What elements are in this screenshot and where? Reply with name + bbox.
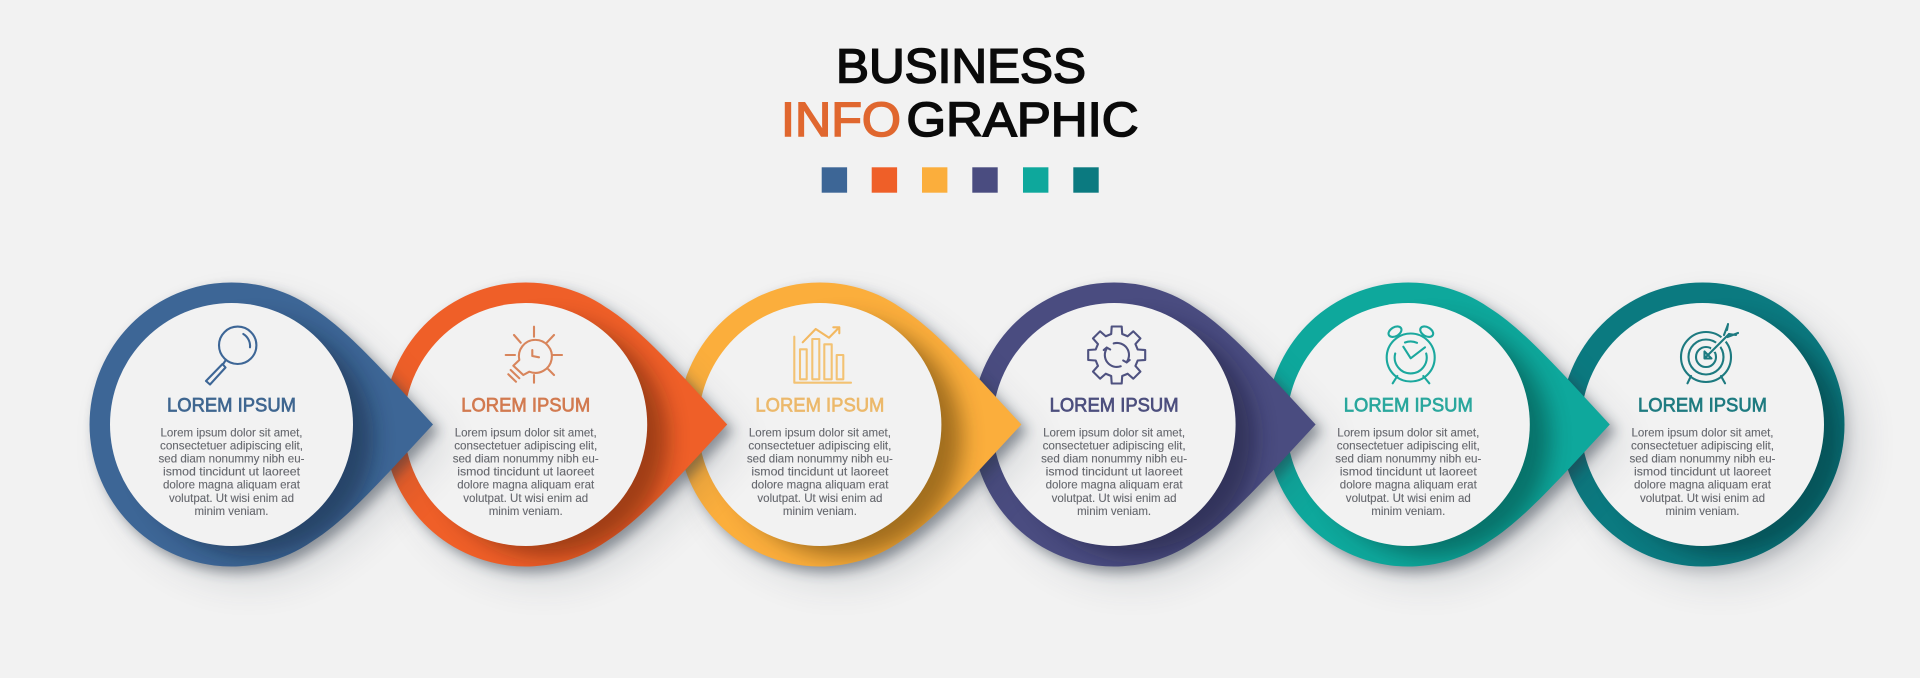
- body text: minim veniam.: [783, 504, 857, 518]
- title: INFO: [781, 94, 901, 147]
- body text: Lorem ipsum dolor sit amet,: [1632, 425, 1774, 439]
- body text: Lorem ipsum dolor sit amet,: [1043, 425, 1185, 439]
- body text: minim veniam.: [1371, 504, 1445, 518]
- body text: consectetuer adipiscing elit,: [1043, 438, 1186, 452]
- body text: consectetuer adipiscing elit,: [1337, 438, 1480, 452]
- body text: ismod tincidunt ut laoreet: [1046, 465, 1183, 479]
- body text: dolore magna aliquam erat: [1340, 478, 1477, 492]
- body text: dolore magna aliquam erat: [751, 478, 889, 492]
- body text: ismod tincidunt ut laoreet: [1340, 465, 1477, 479]
- body text: dolore magna aliquam erat: [457, 478, 595, 492]
- panel: step 3 chart: [678, 282, 1039, 584]
- icon: bar chart with arrow: [794, 327, 851, 383]
- body text: ismod tincidunt ut laoreet: [1634, 465, 1772, 479]
- title: BUSINESS: [836, 40, 1086, 94]
- body text: [158, 425, 304, 518]
- body text: minim veniam.: [194, 504, 268, 518]
- body text: consectetuer adipiscing elit,: [1631, 438, 1774, 452]
- title: [781, 40, 1138, 147]
- icon: light bulb: [506, 327, 562, 383]
- body text: sed diam nonummy nibh eu-: [1630, 452, 1776, 466]
- body text: ismod tincidunt ut laoreet: [751, 465, 889, 479]
- colour legend squares: [822, 167, 1099, 193]
- body text: dolore magna aliquam erat: [1046, 478, 1183, 492]
- heading: LOREM IPSUM: [755, 395, 884, 417]
- body text: sed diam nonummy nibh eu-: [1041, 452, 1187, 466]
- heading: LOREM IPSUM: [1050, 395, 1179, 417]
- body text: Lorem ipsum dolor sit amet,: [1337, 425, 1479, 439]
- icon: magnifier: [206, 327, 256, 384]
- body text: volutpat. Ut wisi enim ad: [757, 491, 882, 505]
- body text: ismod tincidunt ut laoreet: [163, 465, 301, 479]
- body text: dolore magna aliquam erat: [163, 478, 301, 492]
- body text: volutpat. Ut wisi enim ad: [1052, 491, 1177, 505]
- body text: [453, 425, 599, 518]
- heading: LOREM IPSUM: [167, 395, 296, 417]
- icon: target: [1681, 324, 1738, 383]
- body text: volutpat. Ut wisi enim ad: [463, 491, 588, 505]
- body text: consectetuer adipiscing elit,: [160, 438, 303, 452]
- body text: minim veniam.: [489, 504, 563, 518]
- body text: sed diam nonummy nibh eu-: [1335, 452, 1481, 466]
- heading: LOREM IPSUM: [1638, 395, 1767, 417]
- body text: volutpat. Ut wisi enim ad: [1346, 491, 1471, 505]
- body text: minim veniam.: [1077, 504, 1151, 518]
- body text: [1041, 425, 1187, 518]
- body text: dolore magna aliquam erat: [1634, 478, 1772, 492]
- body text: ismod tincidunt ut laoreet: [457, 465, 595, 479]
- panel: step 2 light bulb: [384, 282, 745, 584]
- body text: Lorem ipsum dolor sit amet,: [455, 425, 597, 439]
- body text: consectetuer adipiscing elit,: [454, 438, 597, 452]
- heading: LOREM IPSUM: [461, 395, 590, 417]
- body text: Lorem ipsum dolor sit amet,: [749, 425, 891, 439]
- title: GRAPHIC: [906, 94, 1138, 147]
- panel: step 4 gear: [972, 282, 1334, 584]
- body text: sed diam nonummy nibh eu-: [158, 452, 304, 466]
- body text: sed diam nonummy nibh eu-: [747, 452, 893, 466]
- panel: step 1 magnifier: [90, 282, 451, 584]
- body text: sed diam nonummy nibh eu-: [453, 452, 599, 466]
- icon: gear: [1088, 326, 1145, 384]
- body text: [747, 425, 893, 518]
- panel: step 6 target: [1560, 282, 1862, 584]
- icon: alarm clock: [1387, 324, 1435, 383]
- body text: volutpat. Ut wisi enim ad: [169, 491, 294, 505]
- body text: volutpat. Ut wisi enim ad: [1640, 491, 1765, 505]
- body text: Lorem ipsum dolor sit amet,: [160, 425, 302, 439]
- body text: [1630, 425, 1776, 518]
- body text: minim veniam.: [1666, 504, 1740, 518]
- panel: step 5 alarm clock: [1266, 282, 1628, 584]
- body text: [1335, 425, 1481, 518]
- heading: LOREM IPSUM: [1344, 395, 1473, 417]
- body text: consectetuer adipiscing elit,: [748, 438, 891, 452]
